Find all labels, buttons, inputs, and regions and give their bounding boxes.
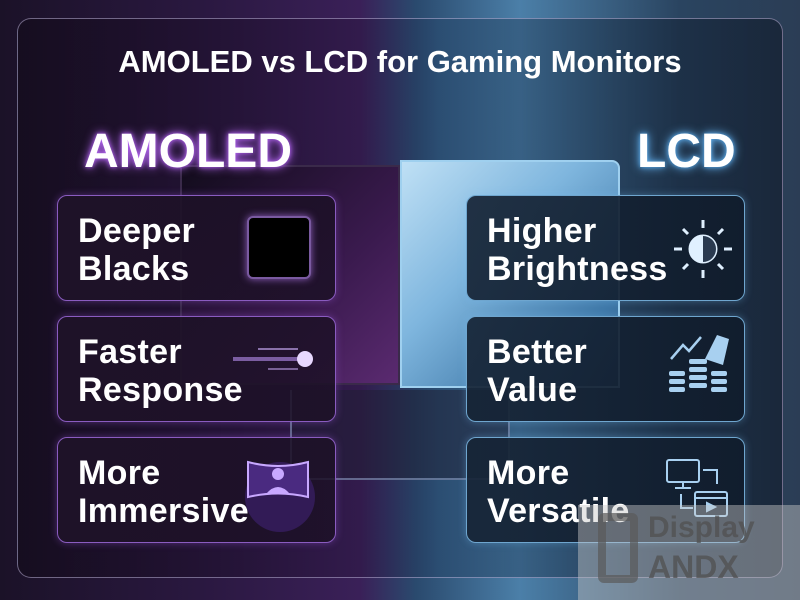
- card: More Versatile: [466, 437, 745, 543]
- screen right: [400, 160, 620, 388]
- icon: coins and tag: [669, 335, 729, 392]
- card: Faster Response: Faster: [78, 333, 182, 371]
- title: AMOLED vs LCD for Gaming Monitors: [118, 44, 682, 79]
- card: Faster Response: [57, 316, 336, 422]
- card: More Versatile: Versatile: [487, 492, 630, 530]
- icon: black square: [247, 216, 311, 279]
- card: More Immersive: [57, 437, 336, 543]
- card: Higher Brightness: [466, 195, 745, 301]
- card: Better Value: Better: [487, 333, 587, 371]
- card: Deeper Blacks: Blacks: [78, 250, 189, 288]
- screen left: [180, 165, 400, 385]
- card: Faster Response: Response: [78, 371, 243, 409]
- icon: immersive screen: [245, 460, 315, 532]
- icon: monitor switching: [666, 459, 728, 517]
- card: Higher Brightness: Brightness: [487, 250, 668, 288]
- icon: sun: [674, 220, 732, 278]
- watermark: [578, 505, 800, 600]
- monitor: [180, 160, 620, 480]
- card: More Immersive: Immersive: [78, 492, 249, 530]
- watermark: Display: [648, 511, 755, 544]
- card: Better Value: Value: [487, 371, 577, 409]
- card: Deeper Blacks: Deeper: [78, 212, 195, 250]
- watermark: ANDX: [648, 549, 739, 585]
- card: More Versatile: More: [487, 454, 569, 492]
- icon: comet: [233, 348, 313, 370]
- heading: AMOLED: AMOLED: [84, 125, 292, 178]
- card: Deeper Blacks: [57, 195, 336, 301]
- stand: [290, 390, 510, 480]
- card: Better Value: [466, 316, 745, 422]
- heading: LCD: LCD: [637, 125, 736, 178]
- card: Higher Brightness: Higher: [487, 212, 596, 250]
- card: More Immersive: More: [78, 454, 160, 492]
